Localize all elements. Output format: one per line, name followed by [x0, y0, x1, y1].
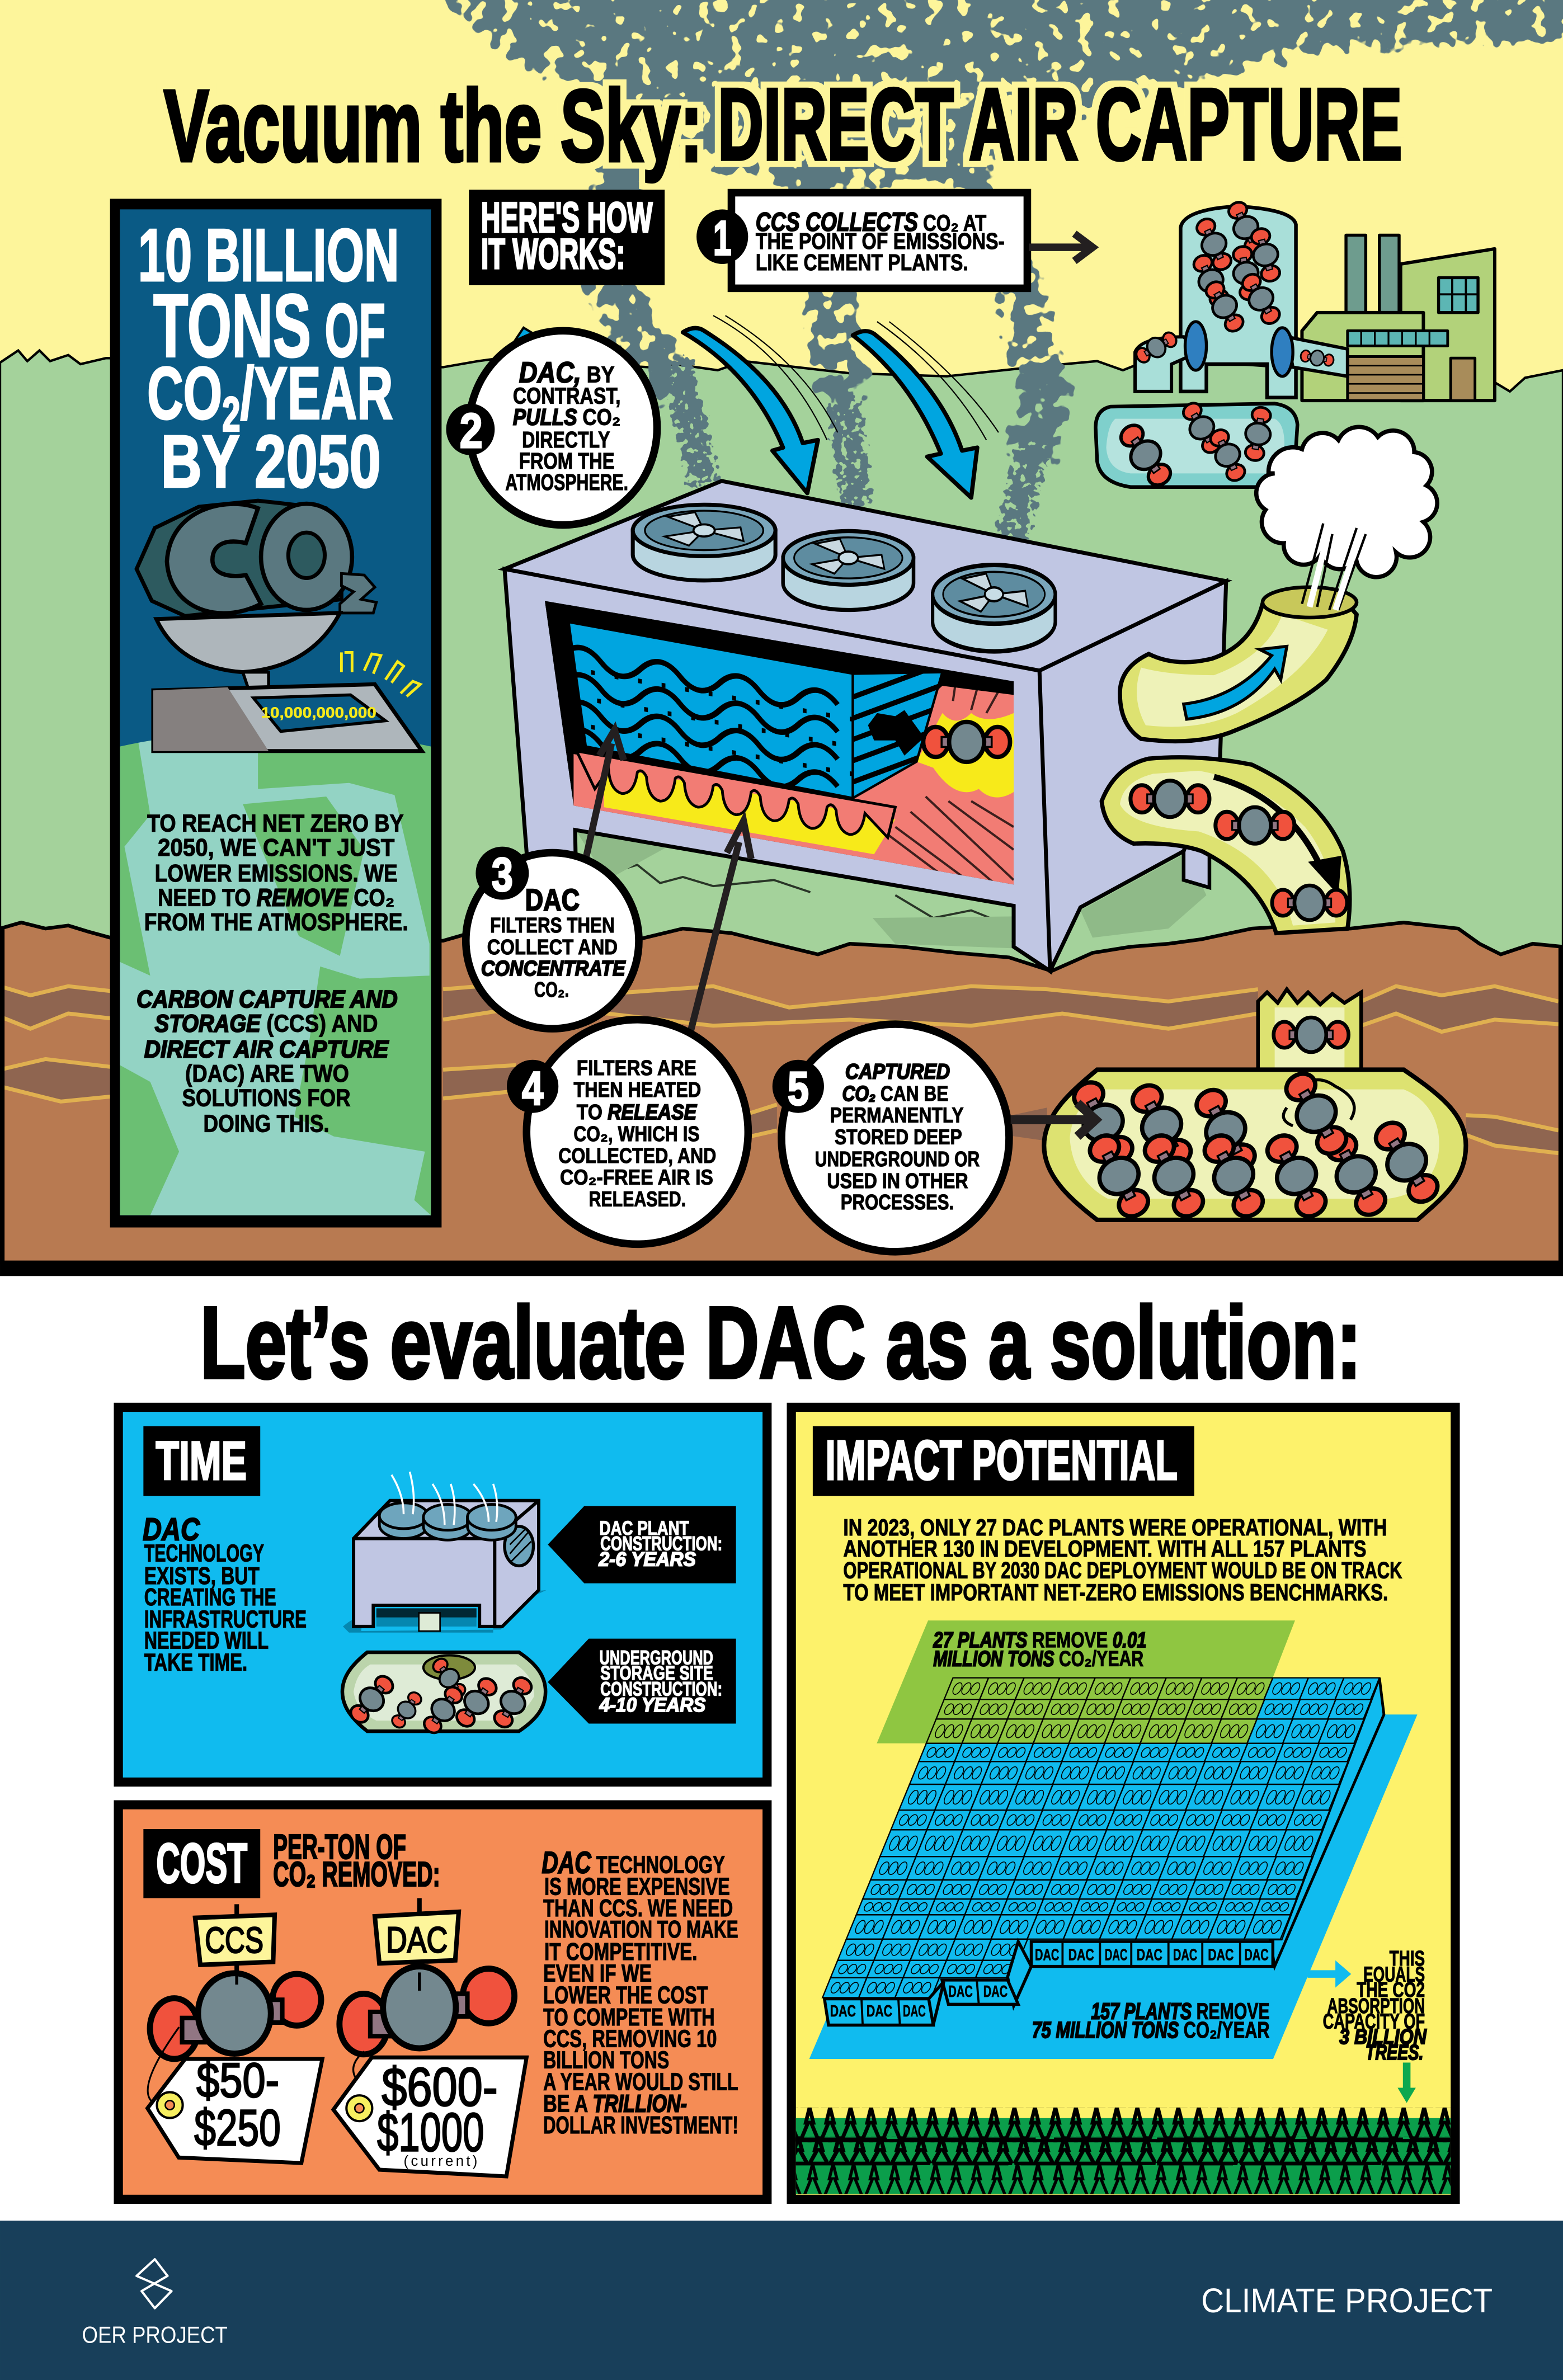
- subheading: [273, 1828, 440, 1894]
- arrow: blue to text: [1307, 1960, 1351, 1988]
- text block: DOLLAR INVESTMENT!: [543, 2112, 738, 2139]
- price tag: DAC: (current): [404, 2153, 477, 2169]
- front face: [505, 569, 1050, 971]
- DAC molecule: [340, 1898, 515, 2054]
- DAC unit fronts right: DAC: [1035, 1947, 1059, 1964]
- title: Vacuum the Sky:: [164, 69, 703, 183]
- heading: impact potential: [813, 1426, 1194, 1496]
- upper pipe: [1120, 587, 1357, 741]
- panel: 10 billion tons: [110, 199, 441, 1228]
- callout 2: DAC bubble: DIRECTLY: [522, 427, 610, 453]
- ground patches: [577, 832, 1207, 948]
- equals text: TREES.: [1366, 2041, 1423, 2065]
- callout: plant construction: DAC PLANT: [599, 1517, 689, 1539]
- intro text: [843, 1514, 1402, 1605]
- text block: BE A TRILLION-: [543, 2090, 687, 2117]
- text block: BILLION TONS: [543, 2047, 669, 2073]
- callout 3 bubble: 3: [492, 848, 513, 901]
- callout 2: DAC bubble: 2: [460, 404, 483, 458]
- heading: here's how it works: IT WORKS:: [481, 230, 625, 278]
- intro text: ANOTHER 130 IN DEVELOPMENT. WITH ALL 157 PLANTS: [843, 1535, 1366, 1562]
- text block: CCS, REMOVING 10: [543, 2025, 717, 2052]
- heading: here's how it works: [469, 190, 665, 285]
- heading: [138, 214, 399, 503]
- callout 2: DAC bubble: [446, 331, 657, 525]
- body text: net zero: 2050, WE CAN'T JUST: [158, 835, 395, 861]
- blue zone label: 157 PLANTS REMOVE: [1091, 1998, 1270, 2024]
- DAC unit fronts right: DAC: [1105, 1947, 1127, 1964]
- panel: landscape scene: [0, 0, 1563, 1276]
- molecule in fire: [923, 722, 1010, 762]
- callout 4 bubble: THEN HEATED: [573, 1078, 701, 1102]
- callout 4 bubble: 4: [522, 1062, 543, 1115]
- body text: CCS and DAC: STORAGE (CCS) AND: [155, 1011, 378, 1038]
- callout 3 bubble: DAC: [525, 884, 580, 917]
- number badge 2: [446, 404, 495, 455]
- callout: storage construction: 4-10 YEARS: [599, 1694, 706, 1716]
- black base bar: [0, 1261, 1563, 1276]
- heading: cost: COST: [156, 1832, 247, 1894]
- callout: plant construction: 2-6 YEARS: [598, 1548, 696, 1570]
- callout: storage construction: UNDERGROUND: [599, 1647, 713, 1669]
- body text: CCS and DAC: [136, 986, 398, 1138]
- smoke plume lower streams: [675, 356, 1038, 549]
- arrow: small blue air flow: [511, 328, 539, 346]
- callout 4 bubble: RELEASED.: [589, 1188, 686, 1212]
- body text: CCS and DAC: DIRECT AIR CAPTURE: [144, 1036, 389, 1063]
- blue zone 157 plants: [809, 1714, 1418, 2059]
- callout 4 bubble: CO₂, WHICH IS: [573, 1123, 700, 1146]
- callout: storage construction: STORAGE SITE: [600, 1662, 713, 1684]
- callout 5 bubble: 5: [788, 1062, 809, 1115]
- title: [164, 67, 1402, 183]
- text block: EXISTS, BUT: [144, 1563, 260, 1590]
- cement plant: [1302, 235, 1495, 400]
- text block: TAKE TIME.: [144, 1649, 247, 1676]
- body text: CCS and DAC: DOING THIS.: [203, 1111, 329, 1138]
- panel frame: [110, 199, 441, 1228]
- panel background: [120, 209, 431, 1215]
- molecules in tank: [1065, 1066, 1447, 1224]
- steam: [392, 1472, 497, 1525]
- text block: [143, 1511, 307, 1676]
- arrow 5 to tank: [1011, 1103, 1096, 1137]
- soil: [0, 922, 1563, 1262]
- DAC unit fronts middle: [942, 1980, 1018, 2004]
- rear leg: [1184, 835, 1209, 888]
- DAC unit fronts middle: DAC: [983, 1983, 1008, 2001]
- fire yellow right: [916, 713, 1014, 798]
- callout 4 bubble: [507, 1020, 748, 1244]
- blue flow arrow: [1184, 647, 1287, 719]
- letter O: [261, 504, 352, 610]
- letter C: [167, 504, 261, 613]
- DAC unit fronts right: DAC: [1208, 1947, 1234, 1964]
- callout 1: CCS: 1: [713, 211, 731, 266]
- callout 5 bubble: USED IN OTHER: [827, 1170, 968, 1193]
- heading: 2: [222, 387, 241, 441]
- text block: INFRASTRUCTURE: [144, 1606, 307, 1633]
- DAC unit fronts left: DAC: [830, 2002, 856, 2020]
- callout 1: CCS: CCS COLLECTS CO₂ AT: [756, 207, 986, 236]
- price tag: DAC: $1000: [377, 2102, 484, 2163]
- intro text: TO MEET IMPORTANT NET-ZERO EMISSIONS BENCHMARKS.: [843, 1579, 1388, 1605]
- price tag: DAC: [333, 2051, 526, 2176]
- arrow: green to trees: [1397, 2063, 1416, 2103]
- text block: DAC TECHNOLOGY: [542, 1846, 725, 1879]
- subheading: PER-TON OF: [273, 1828, 406, 1867]
- DAC molecule: DAC: [386, 1919, 448, 1960]
- callout: storage construction: [548, 1639, 736, 1724]
- heading: 10 BILLION: [138, 214, 399, 297]
- text block: INNOVATION TO MAKE: [544, 1916, 738, 1943]
- green zone label: 27 PLANTS REMOVE 0.01: [933, 1628, 1147, 1652]
- filter front: [568, 622, 853, 798]
- CO back faces: [136, 501, 341, 616]
- icon: mini storage tank: [342, 1652, 545, 1738]
- body text: net zero: TO REACH NET ZERO BY: [147, 810, 404, 837]
- equals text: [1323, 1947, 1427, 2065]
- fans: [633, 505, 1055, 652]
- filter side: [853, 672, 943, 798]
- callout 3 bubble: [466, 847, 639, 1029]
- forest: [796, 2108, 1451, 2194]
- text block: TO COMPETE WITH: [543, 2004, 715, 2031]
- fire drips: [577, 751, 895, 837]
- arrow: blue air flow B: [853, 322, 999, 498]
- DAC unit fronts right: [1008, 1941, 1273, 2006]
- body text: net zero: LOWER EMISSIONS. WE: [155, 860, 398, 887]
- callout: plant construction: CONSTRUCTION:: [600, 1533, 722, 1554]
- heading: BY 2050: [161, 421, 381, 503]
- text block: [542, 1846, 738, 2139]
- panel: impact potential: [792, 1407, 1455, 2199]
- heading: cost: [143, 1829, 260, 1898]
- arrow 4 to heater: [689, 821, 751, 1038]
- callout 5 bubble: CAPTURED: [845, 1061, 950, 1084]
- callout 5 bubble: CO₂ CAN BE: [842, 1082, 948, 1106]
- callout 3 bubble: CONCENTRATE: [481, 957, 626, 981]
- heading: TONS: [153, 275, 311, 375]
- soil layer lower: [0, 1059, 1559, 1153]
- text block: IT COMPETITIVE.: [544, 1939, 697, 1966]
- body text: CCS and DAC: CARBON CAPTURE AND: [136, 986, 398, 1013]
- icon: OER logo: [136, 2259, 172, 2308]
- heading: /YEAR: [241, 352, 393, 435]
- ground sketch marks: [607, 865, 1191, 926]
- green zone label: [933, 1628, 1147, 1671]
- body text: CCS and DAC: (DAC) ARE TWO: [185, 1061, 349, 1087]
- panel background: [792, 1407, 1455, 2199]
- callout 1: CCS: THE POINT OF EMISSIONS-: [756, 228, 1005, 254]
- lower pipe: [1101, 757, 1350, 933]
- callout 5 bubble: [773, 1024, 1009, 1252]
- heading: OF: [325, 288, 385, 373]
- callout 2: DAC bubble: PULLS CO₂: [513, 404, 620, 430]
- callout 2: DAC bubble: DAC, BY: [519, 356, 615, 389]
- arrow 3 to filter: [586, 730, 624, 859]
- panel background: [119, 1805, 767, 2199]
- heading: CO: [147, 352, 258, 435]
- callout 4 bubble: CO₂-FREE AIR IS: [560, 1166, 713, 1189]
- CCS molecule: CCS: [205, 1920, 263, 1960]
- number badge 4: [507, 1060, 558, 1113]
- clean air cloud: [1256, 427, 1437, 610]
- body text: CCS and DAC: SOLUTIONS FOR: [182, 1085, 351, 1111]
- sky: [0, 0, 1563, 394]
- DAC machine: [505, 481, 1226, 971]
- DAC unit fronts left: [825, 1982, 944, 2025]
- text block: IS MORE EXPENSIVE: [544, 1874, 730, 1901]
- panel: cost: [119, 1805, 767, 2199]
- body text: net zero: [144, 810, 408, 936]
- fire pink: [573, 686, 1014, 884]
- scale display number: 10,000,000,000: [261, 704, 376, 721]
- text block: A YEAR WOULD STILL: [543, 2069, 738, 2096]
- text block: THAN CCS. WE NEED: [543, 1895, 733, 1922]
- tank neck: [1258, 989, 1361, 1071]
- tank body: [1044, 1069, 1466, 1220]
- window: [545, 601, 1014, 884]
- arrow: to industry: [1029, 234, 1093, 261]
- callout 4 bubble: TO RELEASE: [577, 1101, 698, 1124]
- heading: time: TIME: [156, 1430, 247, 1491]
- explosion hatching: [888, 680, 1014, 883]
- equals text: 3 BILLION: [1339, 2025, 1427, 2049]
- text block: LOWER THE COST: [543, 1982, 708, 2009]
- plant grid: [822, 1678, 1384, 2025]
- side face: [1270, 1678, 1384, 1967]
- DAC unit fronts middle: DAC: [948, 1983, 973, 2001]
- green field: [0, 351, 1563, 971]
- callout 3 bubble: CO₂.: [534, 978, 569, 1002]
- block fill: [822, 1678, 1380, 1997]
- DAC unit fronts right: DAC: [1173, 1947, 1197, 1964]
- heading: time: [143, 1426, 260, 1496]
- blue zone label: [1032, 1998, 1270, 2043]
- body text: net zero: FROM THE ATMOSPHERE.: [144, 909, 408, 936]
- footer: [0, 2221, 1563, 2380]
- equals text: CAPACITY OF: [1323, 2010, 1425, 2033]
- equals text: THE CO2: [1357, 1978, 1425, 2002]
- side face: [1014, 581, 1226, 971]
- DAC unit fronts left: DAC: [867, 2002, 892, 2020]
- callout 2: DAC bubble: CONTRAST,: [513, 383, 620, 409]
- capture tower: [1180, 206, 1296, 398]
- text block: TECHNOLOGY: [144, 1540, 264, 1567]
- callout 5 bubble: STORED DEEP: [835, 1125, 962, 1149]
- heading: here's how it works: HERE'S HOW: [481, 194, 653, 242]
- panel background: [119, 1407, 767, 1782]
- fire yellow low: [604, 766, 895, 854]
- callout 1: CCS: [696, 193, 1027, 288]
- callout 5 bubble: UNDERGROUND OR: [815, 1148, 980, 1171]
- blue zone label: 75 MILLION TONS CO₂/YEAR: [1032, 2017, 1270, 2043]
- DAC unit fronts right: DAC: [1068, 1947, 1094, 1964]
- callout 2: DAC bubble: ATMOSPHERE.: [505, 469, 628, 495]
- Climate Project wordmark: CLIMATE PROJECT: [1201, 2282, 1493, 2320]
- DAC unit fronts left: DAC: [903, 2002, 926, 2020]
- callout 3 bubble: COLLECT AND: [487, 936, 618, 959]
- icon: CCS storage tank: [1096, 398, 1297, 492]
- text block: NEEDED WILL: [144, 1628, 269, 1655]
- callout 4 bubble: COLLECTED, AND: [558, 1144, 716, 1168]
- callout 2: DAC bubble: FROM THE: [519, 448, 615, 474]
- subheading: CO₂ REMOVED:: [273, 1855, 440, 1894]
- icon: capture tower and cement plant: [1132, 198, 1495, 400]
- OER Project wordmark: OER PROJECT: [82, 2321, 228, 2348]
- icon: mini DAC plant: [343, 1472, 547, 1633]
- equals text: ABSORPTION: [1327, 1995, 1425, 2018]
- callout 1: CCS: LIKE CEMENT PLANTS.: [756, 249, 968, 275]
- storage tank underground: [1044, 989, 1466, 1224]
- DAC unit fronts right: DAC: [1137, 1947, 1162, 1964]
- callout 4 bubble: FILTERS ARE: [577, 1057, 696, 1080]
- DAC unit fronts right: DAC: [1244, 1947, 1269, 1964]
- callout 5 bubble: PROCESSES.: [841, 1191, 954, 1214]
- black arrow: [868, 710, 924, 756]
- callout 5 bubble: PERMANENTLY: [830, 1104, 964, 1128]
- text block: EVEN IF WE: [543, 1960, 652, 1987]
- soil seams: [0, 983, 1559, 1153]
- arrow: blue air flow A: [683, 315, 837, 493]
- equals text: THIS: [1390, 1947, 1425, 1971]
- number badge 1: [696, 209, 748, 264]
- heading: impact potential: IMPACT POTENTIAL: [826, 1429, 1178, 1492]
- soil layer upper: [0, 983, 1559, 1032]
- callout 3 bubble: FILTERS THEN: [490, 914, 615, 937]
- text block: CREATING THE: [144, 1584, 276, 1611]
- price tag: CCS: $50-: [196, 2053, 279, 2108]
- icon: CO2 letters on scale: [136, 501, 422, 751]
- panel: time: [119, 1407, 767, 1782]
- number badge 3: [476, 847, 529, 900]
- top face: [505, 481, 1226, 671]
- globe: [120, 713, 431, 1215]
- green zone label: MILLION TONS CO₂/YEAR: [933, 1646, 1143, 1671]
- price tag: DAC: $600-: [382, 2056, 498, 2117]
- smoke plume upper: [379, 0, 1563, 470]
- equals text: EQUALS: [1363, 1963, 1425, 1987]
- callout: plant construction: [548, 1506, 736, 1583]
- intro text: IN 2023, ONLY 27 DAC PLANTS WERE OPERATIONAL, WITH: [843, 1514, 1387, 1540]
- border edges: [0, 929, 1563, 1262]
- callout: storage construction: CONSTRUCTION:: [600, 1678, 722, 1700]
- body text: net zero: NEED TO REMOVE CO₂: [158, 884, 394, 911]
- CCS molecule: [150, 1904, 321, 2059]
- text block: DAC: [143, 1511, 200, 1547]
- green zone 27 plants: [877, 1620, 1295, 1743]
- number badge 5: [773, 1060, 824, 1113]
- price tag: CCS: $250: [194, 2099, 281, 2157]
- price tag: CCS: [148, 2027, 322, 2163]
